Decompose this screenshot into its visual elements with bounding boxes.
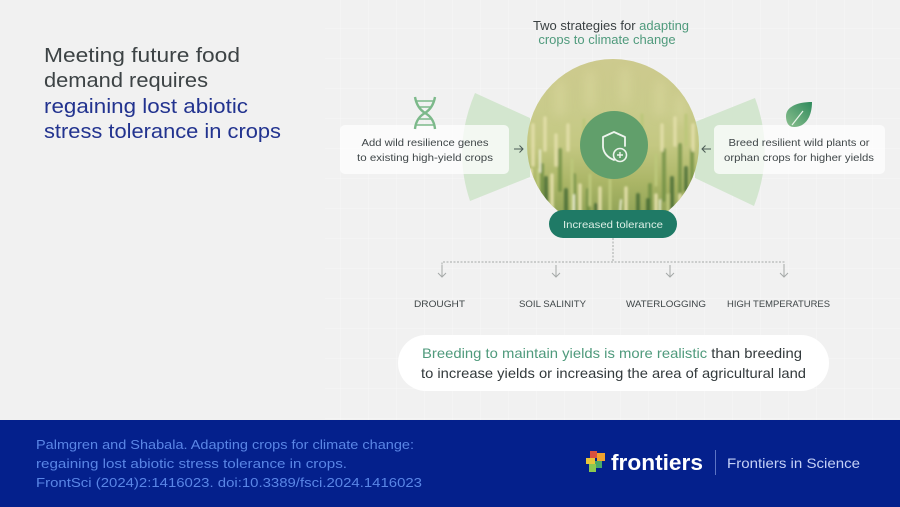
center icon: shield with plus bbox=[580, 111, 648, 179]
citation: FrontSci (2024)2:1416023. doi:10.3389/fsci.2024.1416023 bbox=[36, 475, 422, 490]
title: demand requires bbox=[44, 69, 208, 92]
title: Meeting future food bbox=[44, 44, 240, 67]
diagram heading: crops to climate change bbox=[538, 32, 676, 47]
icon: DNA bbox=[415, 97, 435, 129]
label: drought: DROUGHT bbox=[414, 299, 465, 310]
right wedge bbox=[695, 98, 765, 206]
diagram heading: Two strategies for adapting bbox=[533, 18, 689, 33]
label: soil salinity: SOIL SALINITY bbox=[519, 299, 587, 310]
left card: Add wild resilience genes bbox=[362, 137, 488, 149]
footer band bbox=[0, 420, 900, 507]
label: high temperatures: HIGH TEMPERATURES bbox=[727, 299, 830, 310]
title: stress tolerance in crops bbox=[44, 120, 281, 143]
left wedge bbox=[462, 93, 530, 201]
arrow: left into circle bbox=[514, 146, 523, 152]
logo divider bbox=[715, 450, 716, 475]
logo mark bbox=[586, 451, 605, 472]
arrow: right into circle bbox=[702, 146, 711, 152]
pill: increased tolerance bbox=[549, 210, 677, 238]
wheat photo circle bbox=[527, 59, 699, 211]
callout: conclusion: to increase yields or increasing the area of agricultural land bbox=[421, 365, 806, 381]
title: regaining lost abiotic bbox=[44, 95, 248, 118]
callout: conclusion: Breeding to maintain yields is more realistic than breeding bbox=[422, 345, 802, 361]
journal name: Frontiers in Science bbox=[727, 455, 860, 471]
callout: conclusion bbox=[398, 335, 829, 391]
right card bbox=[714, 125, 885, 174]
logo wordmark: frontiers bbox=[611, 450, 703, 475]
right card: Breed resilient wild plants or bbox=[728, 137, 870, 149]
citation: regaining lost abiotic stress tolerance in crops. bbox=[36, 456, 347, 471]
icon: leaf bbox=[786, 102, 812, 127]
right card: orphan crops for higher yields bbox=[724, 152, 874, 164]
title bbox=[44, 44, 281, 143]
citation bbox=[36, 437, 422, 490]
citation: Palmgren and Shabala. Adapting crops for climate change: bbox=[36, 437, 414, 452]
left card: to existing high-yield crops bbox=[357, 152, 493, 164]
pill: increased tolerance: Increased tolerance bbox=[563, 219, 663, 231]
dotted connectors bbox=[438, 238, 788, 277]
diagram heading bbox=[533, 18, 689, 47]
left card bbox=[340, 125, 509, 174]
label: waterlogging: WATERLOGGING bbox=[626, 299, 706, 310]
